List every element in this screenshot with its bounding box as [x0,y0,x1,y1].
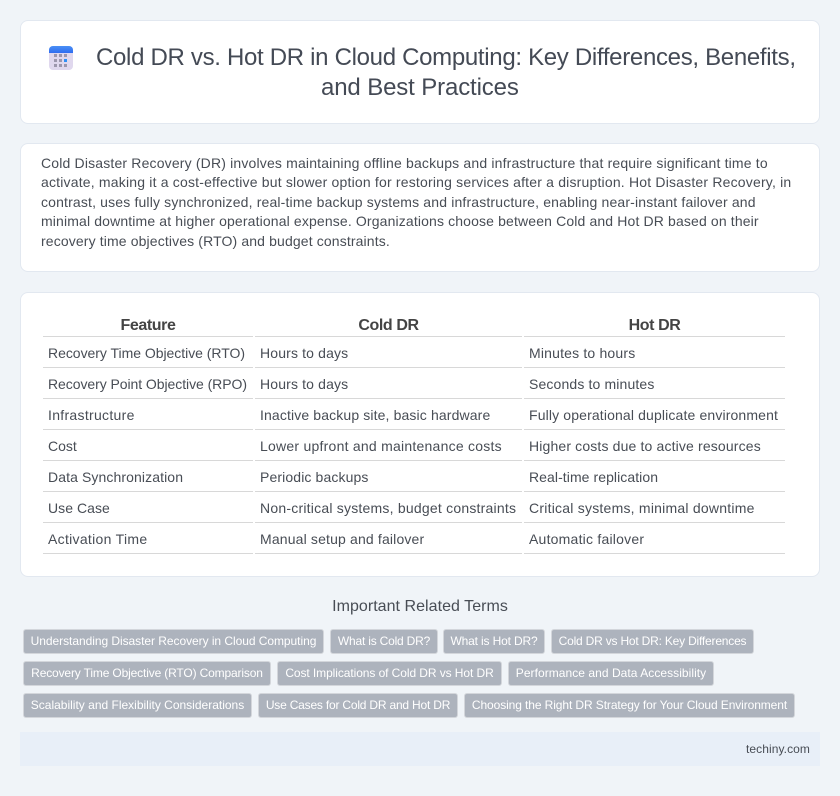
row: infrastructure: Fully operational duplicate environment [529,407,778,423]
tag: Performance and Data Accessibility [516,666,706,680]
text block: description [41,155,791,249]
icon: calendar [49,46,73,70]
tag: Choosing the Right DR Strategy for Your Cloud Environment [472,698,787,712]
row: use case [48,500,755,516]
table header: Hot DR [629,317,680,334]
row: RPO: Seconds to minutes [529,376,654,392]
tag [330,629,438,654]
panel: comparison table [20,292,820,577]
tag [23,693,252,718]
table header [120,317,680,334]
tag [23,629,324,654]
tag: Recovery Time Objective (RTO) Comparison [31,666,263,680]
heading: important related terms: Important Related Terms [332,598,508,615]
footer [20,732,820,766]
row: cost: Cost [48,438,77,454]
text block: description: activate, making it a cost-effective but slower option for restoring services after a disruption. Hot Disaster Recovery, in [41,174,791,190]
text block: description: recovery time objectives (RTO) and budget constraints. [41,233,390,249]
row: data synchronization: Periodic backups [260,469,369,485]
row: RPO: Recovery Point Objective (RPO) [48,376,247,392]
tag: Understanding Disaster Recovery in Cloud Computing [31,634,316,648]
text block: description: contrast, uses fully synchronized, real-time backup systems and infrastructure, enabling near-instant failover and [41,194,756,210]
row: activation time: Manual setup and failover [260,531,424,547]
row: RTO: Hours to days [260,345,348,361]
row: infrastructure [48,407,778,423]
panel: header [20,20,820,124]
row: data synchronization: Real-time replication [529,469,658,485]
tag: Scalability and Flexibility Considerations [31,698,244,712]
title: and Best Practices [321,74,519,101]
tag: Use Cases for Cold DR and Hot DR [266,698,450,712]
text block: description: Cold Disaster Recovery (DR) involves maintaining offline backups and infrastructure that require significant time to [41,155,768,171]
row: activation time: Activation Time [48,531,147,547]
table header: Cold DR [358,317,419,334]
row: RPO [48,376,654,392]
tag [551,629,754,654]
row: use case: Non-critical systems, budget constraints [260,500,516,516]
text block: description: minimal downtime at higher operational expense. Organizations choose between Cold and Hot DR based on their [41,213,759,229]
row: cost: Lower upfront and maintenance costs [260,438,502,454]
tag [508,661,714,686]
row: RTO: Minutes to hours [529,345,635,361]
tag [443,629,545,654]
row: use case: Use Case [48,500,110,516]
title [96,44,796,101]
row: data synchronization: Data Synchronization [48,469,183,485]
row: RPO: Hours to days [260,376,348,392]
row: RTO [48,345,635,361]
title: Cold DR vs. Hot DR in Cloud Computing: Key Differences, Benefits, [96,44,796,71]
tag [464,693,795,718]
footer brand: techiny.com [746,742,810,756]
row: infrastructure: Inactive backup site, basic hardware [260,407,490,423]
tag: Cold DR vs Hot DR: Key Differences [559,634,746,648]
tag [258,693,458,718]
tag: What is Hot DR? [450,634,538,648]
tag [23,661,271,686]
row: cost [48,438,761,454]
panel: description [20,143,820,272]
tag: What is Cold DR? [338,634,430,648]
tag [277,661,502,686]
row: RTO: Recovery Time Objective (RTO) [48,345,245,361]
row: cost: Higher costs due to active resources [529,438,761,454]
row: infrastructure: Infrastructure [48,407,135,423]
tag: Cost Implications of Cold DR vs Hot DR [285,666,494,680]
row: data synchronization [48,469,658,485]
row: activation time [48,531,644,547]
related terms tags [23,629,795,718]
row: use case: Critical systems, minimal downtime [529,500,755,516]
table header: Feature [120,317,176,334]
row: activation time: Automatic failover [529,531,644,547]
